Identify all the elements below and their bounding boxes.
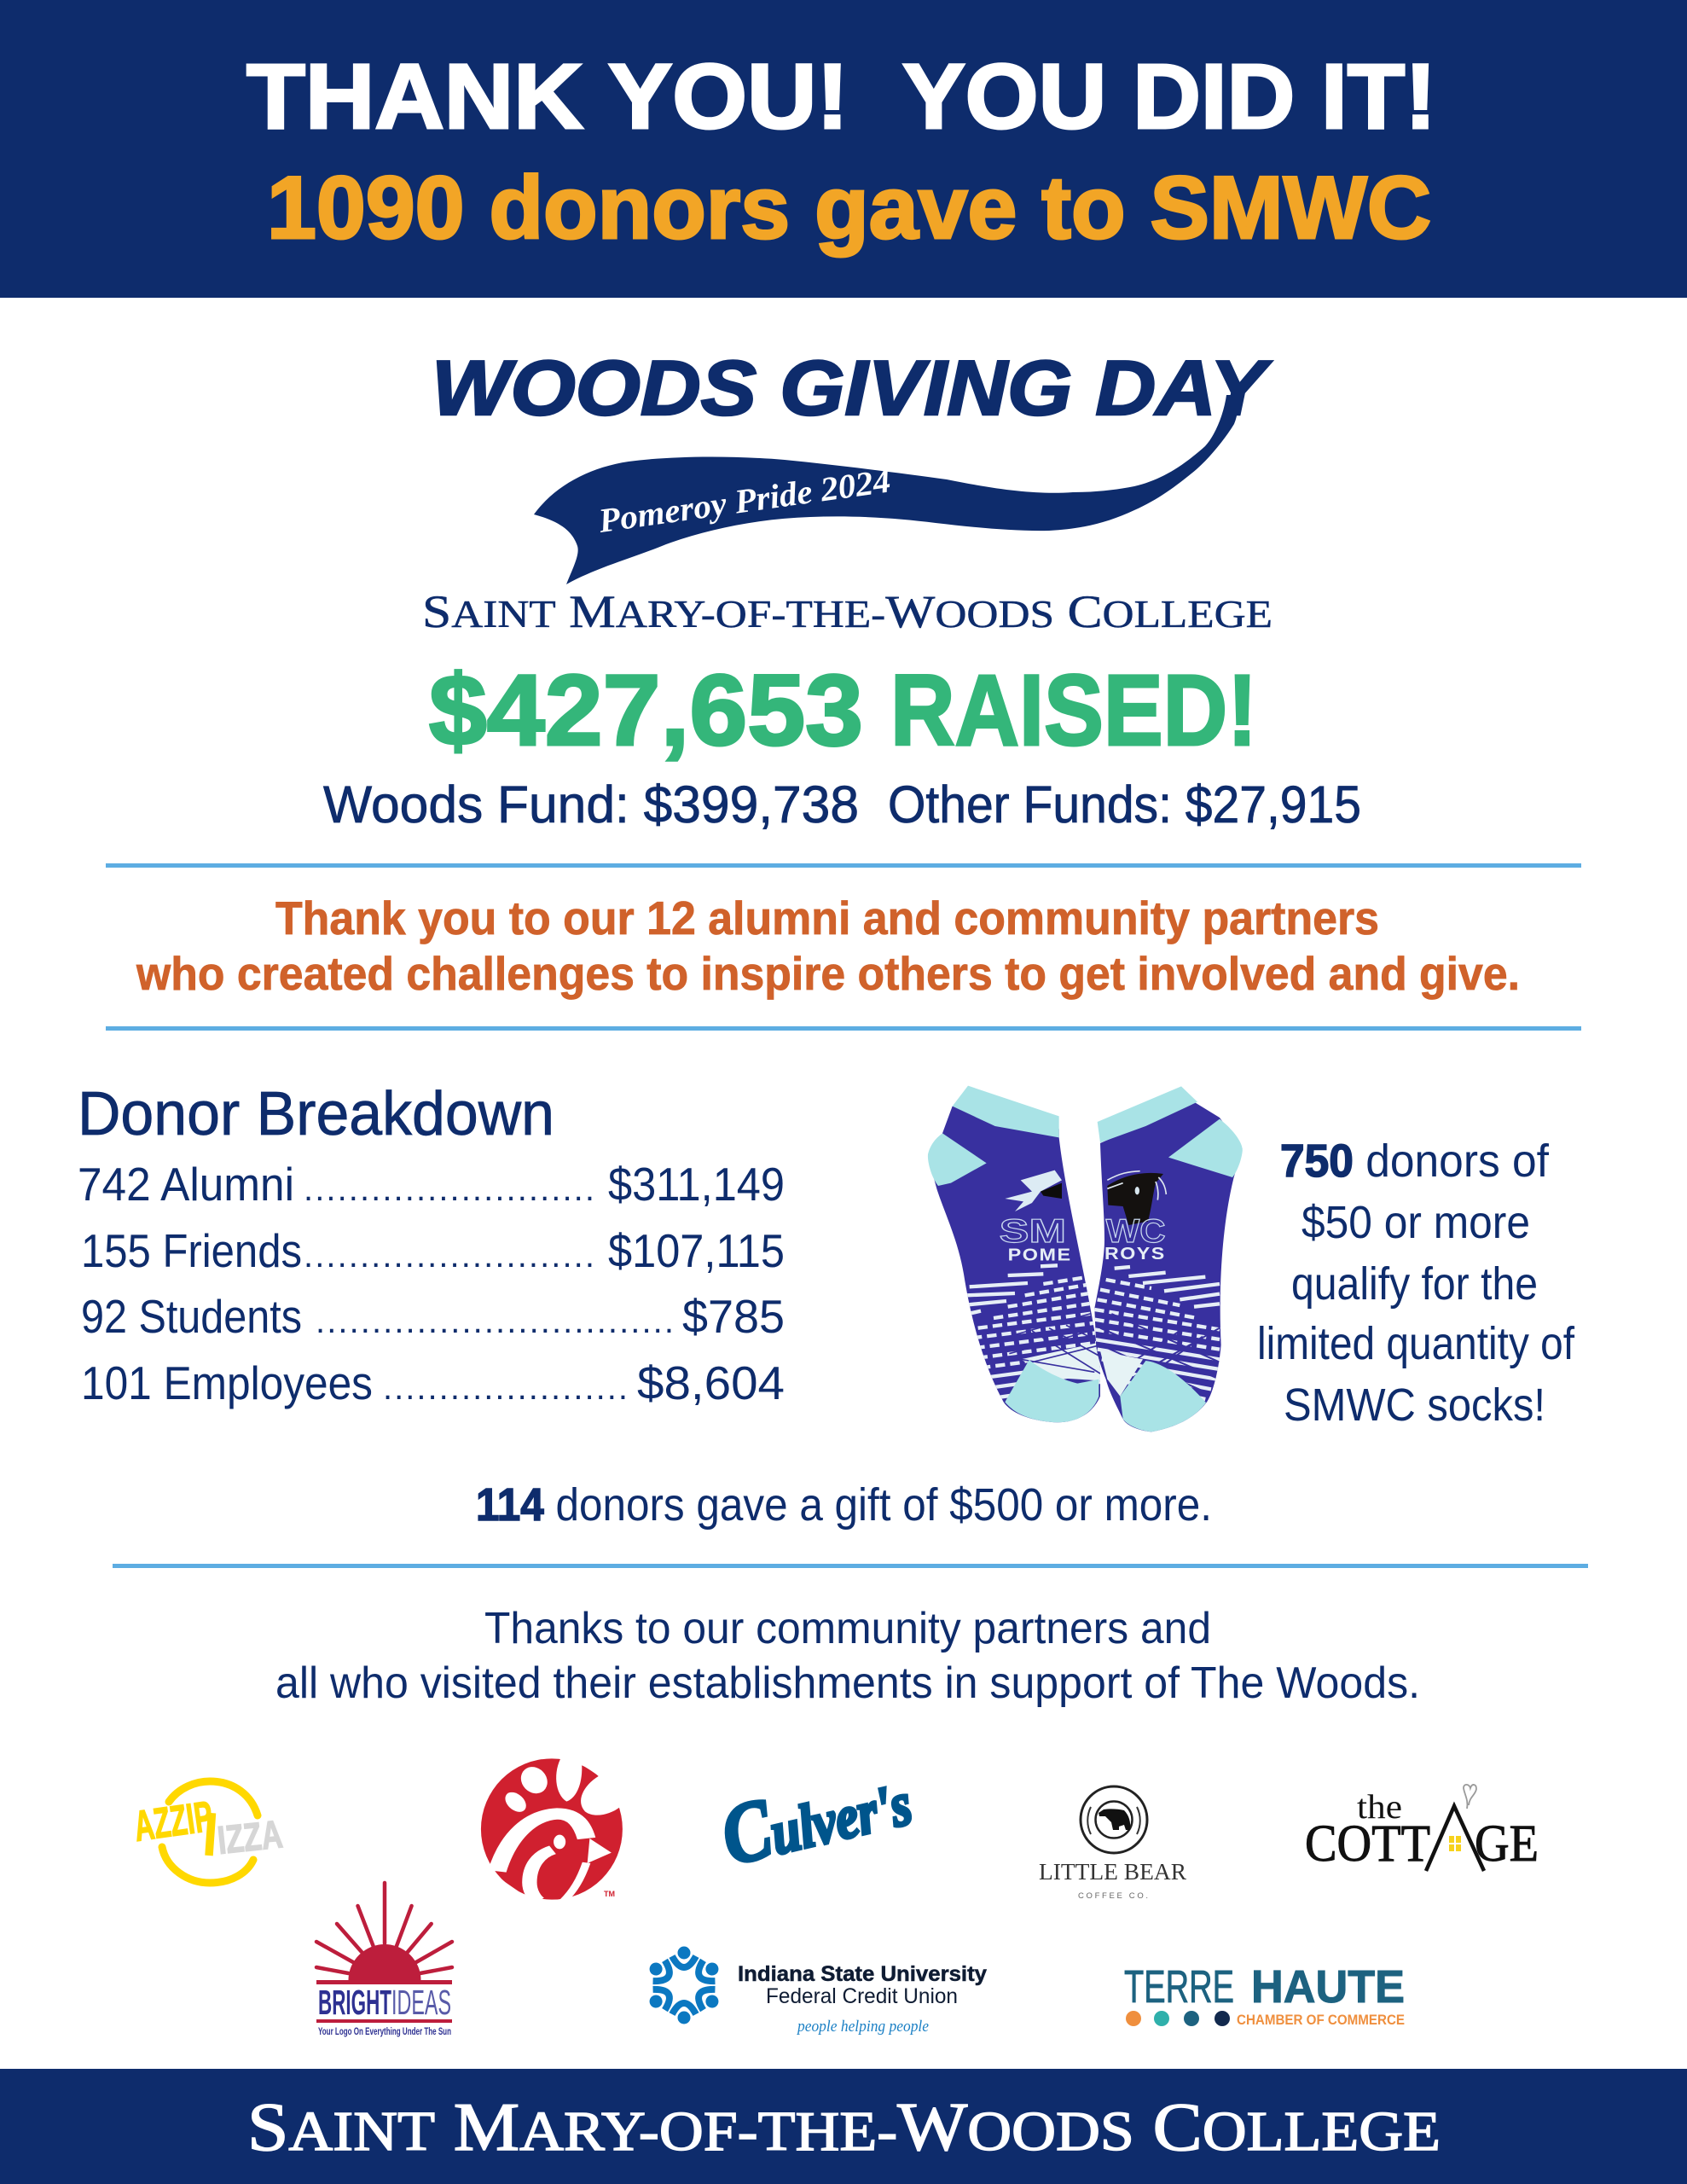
row: employees — [81, 1356, 785, 1409]
row: students: ................................ — [316, 1303, 674, 1340]
row: employees: 101 Employees — [81, 1356, 373, 1409]
logo: Terre Haute Chamber of Commerce — [1124, 1961, 1405, 2028]
row: employees: ...................... — [383, 1369, 628, 1407]
row: alumni — [78, 1158, 785, 1211]
row: alumni: 742 Alumni — [78, 1158, 294, 1211]
heading: thank you: THANK YOU! — [246, 44, 849, 148]
left sock: POME — [1008, 1246, 1072, 1265]
row: friends: .......................... — [304, 1237, 594, 1275]
logo: Bright Ideas — [316, 1883, 452, 2037]
partners thank-you message: Thank you to our 12 alumni and community partners — [275, 892, 1379, 944]
community partners thanks — [275, 1604, 1420, 1708]
row: employees: $8,604 — [637, 1356, 785, 1409]
row: students — [81, 1290, 785, 1343]
logo: Bright Ideas: IDEAS — [391, 1983, 451, 2022]
right sock — [1094, 1086, 1243, 1432]
logo: Terre Haute Chamber of Commerce: TERRE — [1124, 1961, 1234, 2013]
row: alumni: $311,149 — [608, 1158, 785, 1211]
logo: Little Bear Coffee — [1039, 1786, 1186, 1901]
total raised — [429, 654, 1257, 767]
logo: Azzip Pizza: AZZIP — [131, 1792, 216, 1850]
logo: The Cottage: GE — [1475, 1815, 1539, 1873]
footer band — [0, 2069, 1687, 2184]
logo: Terre Haute Chamber of Commerce: HAUTE — [1251, 1961, 1405, 2013]
logo: Woods Giving Day — [422, 346, 1272, 637]
sock qualification text: SMWC socks! — [1284, 1380, 1545, 1431]
fund split — [323, 775, 1361, 834]
logo: Azzip Pizza — [131, 1781, 285, 1883]
logo: Terre Haute Chamber of Commerce: CHAMBER OF COMMERCE — [1237, 2012, 1405, 2028]
subheading: donor count: 1090 donors gave to SMWC — [267, 159, 1431, 258]
row: students: $785 — [682, 1290, 785, 1343]
sock toe — [1005, 1360, 1099, 1422]
row: friends — [81, 1224, 785, 1277]
mascot head — [1107, 1173, 1163, 1225]
header band — [0, 0, 1687, 298]
logo: Indiana State University Federal Credit Union: Federal Credit Union — [766, 1984, 958, 2008]
logo: The Cottage — [1305, 1785, 1539, 1873]
left sock: SM — [1000, 1212, 1066, 1250]
logo: Indiana State University Federal Credit Union: Indiana State University — [738, 1962, 987, 1986]
logo: Bright Ideas: BRIGHT — [318, 1983, 391, 2022]
logo: Azzip Pizza: IZZA — [216, 1811, 285, 1862]
community partners thanks: Thanks to our community partners and — [484, 1604, 1211, 1653]
sock cuff — [953, 1086, 1059, 1137]
icon: ring of people — [645, 1947, 723, 2024]
partners thank-you message: who created challenges to inspire others to get involved and give. — [136, 947, 1520, 1000]
pennant swoosh — [534, 395, 1240, 584]
right sock: WC — [1106, 1212, 1166, 1250]
logo: The Cottage: the — [1357, 1787, 1402, 1826]
sock qualification text — [1257, 1136, 1575, 1431]
sock heel — [928, 1133, 987, 1186]
partners thank-you message — [136, 892, 1520, 1000]
logo: Little Bear Coffee: LITTLE BEAR — [1039, 1859, 1186, 1885]
trademark mark: TM — [604, 1890, 615, 1898]
sock qualification text: $50 or more — [1301, 1197, 1530, 1248]
fund split: Other Funds: $27,915 — [888, 775, 1361, 834]
logo: The Cottage: COTT — [1305, 1815, 1430, 1873]
pennant text: Pomeroy Pride 2024 — [595, 461, 893, 540]
left sock — [928, 1086, 1100, 1422]
community partners thanks: all who visited their establishments in support of The Woods. — [275, 1658, 1420, 1708]
sock qualification text: limited quantity of — [1257, 1318, 1575, 1369]
logo: Indiana State University Federal Credit Union: people helping people — [796, 2018, 929, 2036]
logo: Little Bear Coffee: COFFEE CO. — [1078, 1891, 1148, 1901]
logo: Chick-fil-A — [444, 1755, 643, 1917]
heading: thank you — [246, 44, 1436, 148]
row: friends: 155 Friends — [81, 1224, 302, 1277]
college name: SAINT MARY-OF-THE- WOODS COLLEGE — [422, 586, 1272, 637]
footer college name: SAINT MARY-OF-THE- WOODS COLLEGE — [247, 2090, 1441, 2165]
row: friends: $107,115 — [608, 1224, 785, 1277]
right sock: ROYS — [1104, 1244, 1166, 1263]
icon: pair of socks — [928, 1086, 1243, 1432]
logo: Bright Ideas: Your Logo On Everything Under The Sun — [318, 2025, 451, 2037]
row: students: 92 Students — [81, 1290, 302, 1343]
logo wordmark: WOODS GIVING DAY — [432, 346, 1272, 432]
major gifts note: 114 donors gave a gift of $500 or more. — [476, 1479, 1212, 1531]
row: alumni: .......................... — [304, 1170, 594, 1208]
panel: donor breakdown — [78, 1080, 785, 1409]
logo: Indiana State University Federal Credit Union — [645, 1947, 987, 2036]
donor breakdown heading: Donor Breakdown — [78, 1080, 554, 1148]
sock qualification text: 750 donors of — [1280, 1136, 1550, 1187]
sock qualification text: qualify for the — [1291, 1258, 1538, 1310]
total raised: $427,653 — [429, 654, 863, 767]
logo: Culver's: Culver's — [713, 1748, 919, 1883]
total raised: RAISED! — [890, 654, 1257, 767]
fund split: Woods Fund: $399,738 — [323, 775, 859, 834]
heading: thank you: YOU DID IT! — [902, 44, 1436, 148]
